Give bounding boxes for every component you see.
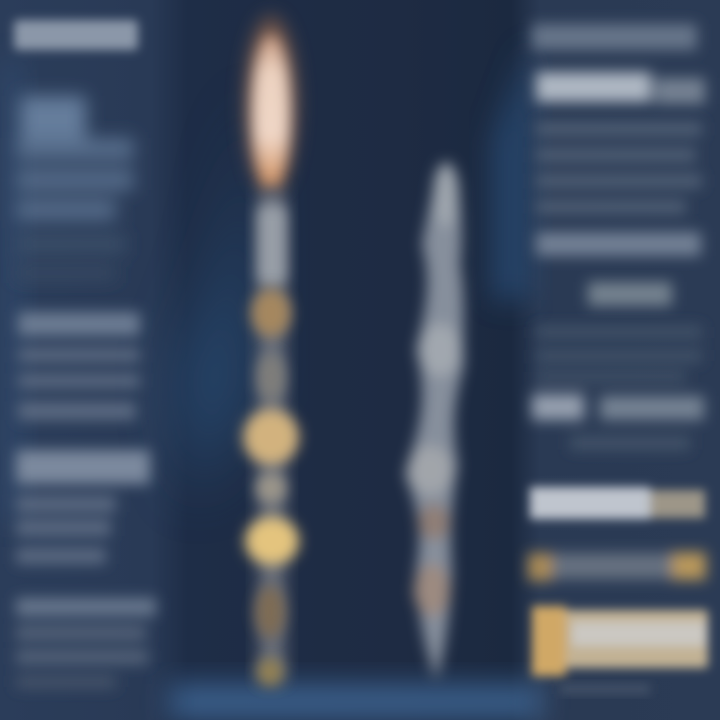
upper stem segment (258, 205, 286, 285)
right panel: light bar (530, 487, 705, 519)
node 7 (257, 658, 283, 686)
node 2 (257, 353, 285, 401)
node 4 (256, 473, 286, 503)
left panel: text block 1 (16, 96, 134, 278)
right panel: amber bar (528, 552, 706, 581)
column stem (260, 190, 284, 680)
left panel: text block 3 (16, 450, 150, 564)
node 3 (243, 409, 299, 465)
flame core (252, 34, 290, 190)
right panel: text block 2 (532, 326, 704, 450)
right panel: text block 1 (536, 122, 702, 256)
left panel: text block 4 (16, 598, 156, 688)
left panel: text block 2 (18, 312, 140, 420)
central column: flame and nodes (243, 15, 299, 686)
right panel: footer text (560, 684, 650, 694)
node 6 (255, 586, 285, 638)
right panel: highlighted box (532, 606, 708, 676)
flame glow (244, 15, 298, 195)
wavy column (405, 160, 464, 680)
right panel: title (532, 24, 705, 104)
left panel: heading (14, 20, 138, 50)
right panel: subheading (588, 282, 672, 306)
node 1 (251, 289, 291, 337)
node 5 (245, 517, 299, 565)
